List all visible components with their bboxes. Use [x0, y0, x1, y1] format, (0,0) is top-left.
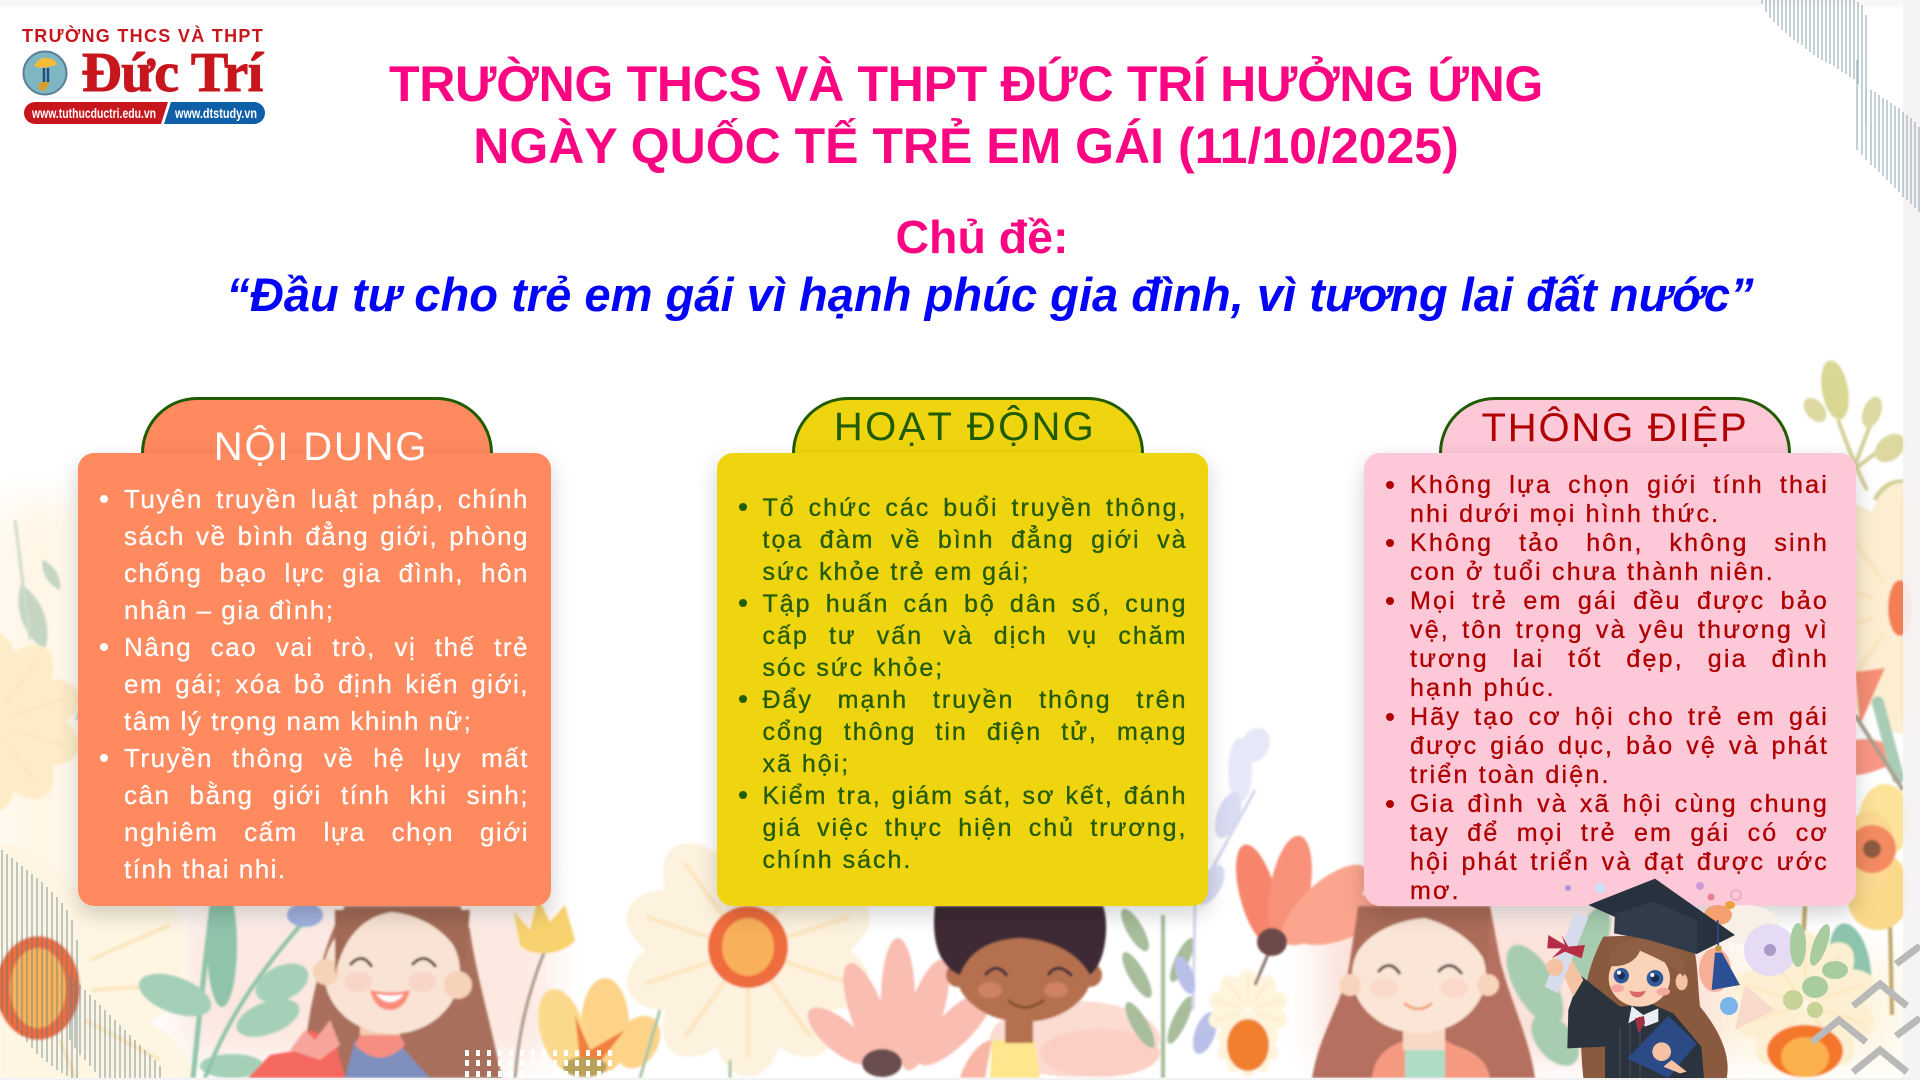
white dot grid — [465, 1050, 612, 1077]
text list: hoạt động: Tổ chức các buổi truyền thông, — [762, 494, 1188, 522]
text list: hoạt động: cấp tư vấn và dịch vụ chăm — [762, 622, 1188, 650]
text list: thông điệp: hội phát triển và đạt được ước — [1410, 848, 1829, 876]
text list: thông điệp: con ở tuổi chưa thành niên. — [1410, 558, 1775, 586]
orange garden flower — [530, 978, 669, 1077]
text list: hoạt động: Tập huấn cán bộ dân số, cung — [762, 590, 1188, 618]
logo emblem — [22, 50, 68, 96]
chevron arrows — [1812, 946, 1920, 1072]
green leaves near first child — [133, 883, 323, 1078]
text list: thông điệp: hạnh phúc. — [1410, 674, 1556, 702]
top margin strip — [0, 0, 1903, 7]
central daisy — [616, 823, 880, 1078]
logo web address pill: www.tuthucductri.edu.vn — [31, 106, 156, 121]
text list: hoạt động: sóc sức khỏe; — [762, 654, 944, 682]
theme quote: “Đầu tư cho trẻ em gái vì hạnh phúc gia đình, vì tương lai đất nước” — [226, 268, 1754, 321]
panel: hoạt động — [708, 397, 1217, 923]
graduate collar and tie — [1628, 1006, 1658, 1027]
striped decoration top right — [1762, 0, 1919, 212]
text list: nội dung: nghiêm cấm lựa chọn giới — [124, 816, 529, 846]
panel body: nội dung — [78, 453, 551, 906]
text list: nội dung — [100, 484, 529, 884]
text list: thông điệp: được giáo dục, bảo vệ và phát — [1410, 732, 1829, 760]
yellow tulip — [514, 898, 575, 1078]
heading: hoạt động: HOẠT ĐỘNG — [834, 405, 1096, 449]
graduation cap — [1588, 879, 1735, 954]
text list: hoạt động: cổng thông tin điện tử, mạng — [762, 718, 1188, 746]
logo wordmark: Đức Trí — [81, 42, 263, 104]
text list: thông điệp: tương lai tốt đẹp, gia đình — [1410, 644, 1829, 672]
soft background washes — [0, 500, 1903, 1060]
bottom right flower — [1729, 931, 1881, 1077]
scroll ribbon — [1547, 935, 1585, 958]
text list: nội dung: em gái; xóa bỏ định kiến giới, — [124, 668, 529, 698]
cap tassel — [1715, 920, 1721, 948]
school logo — [22, 25, 265, 124]
green sprig — [1116, 905, 1198, 1078]
text list: thông điệp — [1386, 470, 1829, 904]
graduate hair — [1581, 933, 1728, 1078]
graduate girl — [1545, 879, 1740, 1078]
panel body: hoạt động — [717, 453, 1208, 906]
heading: nội dung: NỘI DUNG — [214, 425, 428, 469]
text list: hoạt động: tọa đàm về bình đẳng giới và — [762, 526, 1188, 554]
text list: nội dung: tính thai nhi. — [124, 854, 287, 884]
tab shape: nội dung — [141, 397, 493, 453]
child two: smiling boy — [934, 906, 1160, 1078]
text list: thông điệp: triển toàn diện. — [1410, 760, 1611, 788]
text list: thông điệp: Gia đình và xã hội cùng chung — [1410, 790, 1829, 818]
text list: hoạt động: sức khỏe trẻ em gái; — [762, 558, 1030, 586]
leaves behind graduate — [1495, 902, 1619, 1075]
right side yellow flower — [1845, 784, 1911, 917]
text list: nội dung: Truyền thông về hệ lụy mất — [124, 742, 529, 772]
panel body: thông điệp — [1364, 453, 1856, 906]
title line one: TRƯỜNG THCS VÀ THPT ĐỨC TRÍ HƯỞNG ỨNG — [389, 56, 1543, 112]
left side leaves — [10, 520, 119, 726]
right side cream flower — [1773, 483, 1920, 733]
right margin strip — [1903, 0, 1920, 1080]
striped decoration bottom left — [2, 850, 160, 1078]
logo caption: TRƯỜNG THCS VÀ THPT — [22, 26, 264, 46]
text list: nội dung: sách về bình đẳng giới, phòng — [124, 520, 529, 550]
text list: thông điệp: Hãy tạo cơ hội cho trẻ em gái — [1410, 702, 1829, 730]
graduate face — [1609, 950, 1670, 1007]
text list: hoạt động: Kiểm tra, giám sát, sơ kết, đánh — [762, 782, 1188, 810]
text list: thông điệp: Không lựa chọn giới tính thai — [1410, 470, 1829, 498]
left upper yellow flower — [0, 631, 87, 813]
text list: hoạt động: Đẩy mạnh truyền thông trên — [762, 686, 1188, 714]
panel: thông điệp — [1355, 397, 1865, 923]
text list: hoạt động — [739, 494, 1188, 874]
text list: nội dung: Tuyên truyền luật pháp, chính — [124, 484, 529, 514]
graduate gown — [1567, 975, 1704, 1078]
red flower — [1227, 832, 1392, 985]
floral bouquet beside graduate — [1699, 901, 1848, 1030]
heading: thông điệp: THÔNG ĐIỆP — [1482, 406, 1748, 450]
tab shape: hoạt động — [792, 397, 1144, 453]
logo web address pill — [24, 102, 265, 124]
upper right sprig — [1799, 358, 1911, 500]
tab shape: thông điệp — [1439, 397, 1791, 453]
graduate scroll — [1545, 913, 1588, 993]
text list: hoạt động: xã hội; — [762, 750, 850, 778]
bottom margin strip — [0, 1078, 1920, 1080]
text list: thông điệp: mơ. — [1410, 876, 1461, 904]
title line two: NGÀY QUỐC TẾ TRẺ EM GÁI (11/10/2025) — [473, 118, 1459, 174]
text list: thông điệp: tay để mọi trẻ em gái có cơ — [1410, 818, 1829, 846]
lavender sprig — [1171, 722, 1276, 1057]
confetti over pink panel — [1565, 882, 1741, 900]
graduate book — [1627, 1016, 1697, 1078]
text list: thông điệp: nhi dưới mọi hình thức. — [1410, 500, 1720, 528]
panel: nội dung — [69, 397, 560, 923]
text list: nội dung: Nâng cao vai trò, vị thế trẻ — [124, 632, 529, 662]
right side green leaves — [1800, 870, 1908, 1015]
left lower cream flower — [0, 845, 192, 1078]
text list: nội dung: chống bạo lực gia đình, hôn — [124, 558, 529, 588]
right side salmon petals — [1855, 668, 1905, 790]
text list: hoạt động: chính sách. — [762, 846, 912, 874]
pink flower — [799, 938, 1002, 1077]
text list: nội dung: tâm lý trọng nam khinh nữ; — [124, 706, 472, 736]
small daisy — [1205, 969, 1291, 1077]
theme heading: Chủ đề: — [895, 211, 1069, 263]
text list: nội dung: cân bằng giới tính khi sinh; — [124, 780, 529, 810]
text list: hoạt động: giá việc thực hiện chủ trương, — [762, 814, 1188, 842]
child one: smiling girl — [248, 906, 502, 1078]
child three: girl with long hair — [1312, 906, 1535, 1078]
text list: thông điệp: vệ, tôn trọng và yêu thương vì — [1410, 616, 1829, 644]
graduate arm and hand — [1557, 957, 1583, 997]
text list: nội dung: nhân – gia đình; — [124, 594, 334, 624]
text list: thông điệp: Không tảo hôn, không sinh — [1410, 528, 1829, 556]
title — [389, 56, 1543, 174]
text list: thông điệp: Mọi trẻ em gái đều được bảo — [1410, 586, 1829, 614]
